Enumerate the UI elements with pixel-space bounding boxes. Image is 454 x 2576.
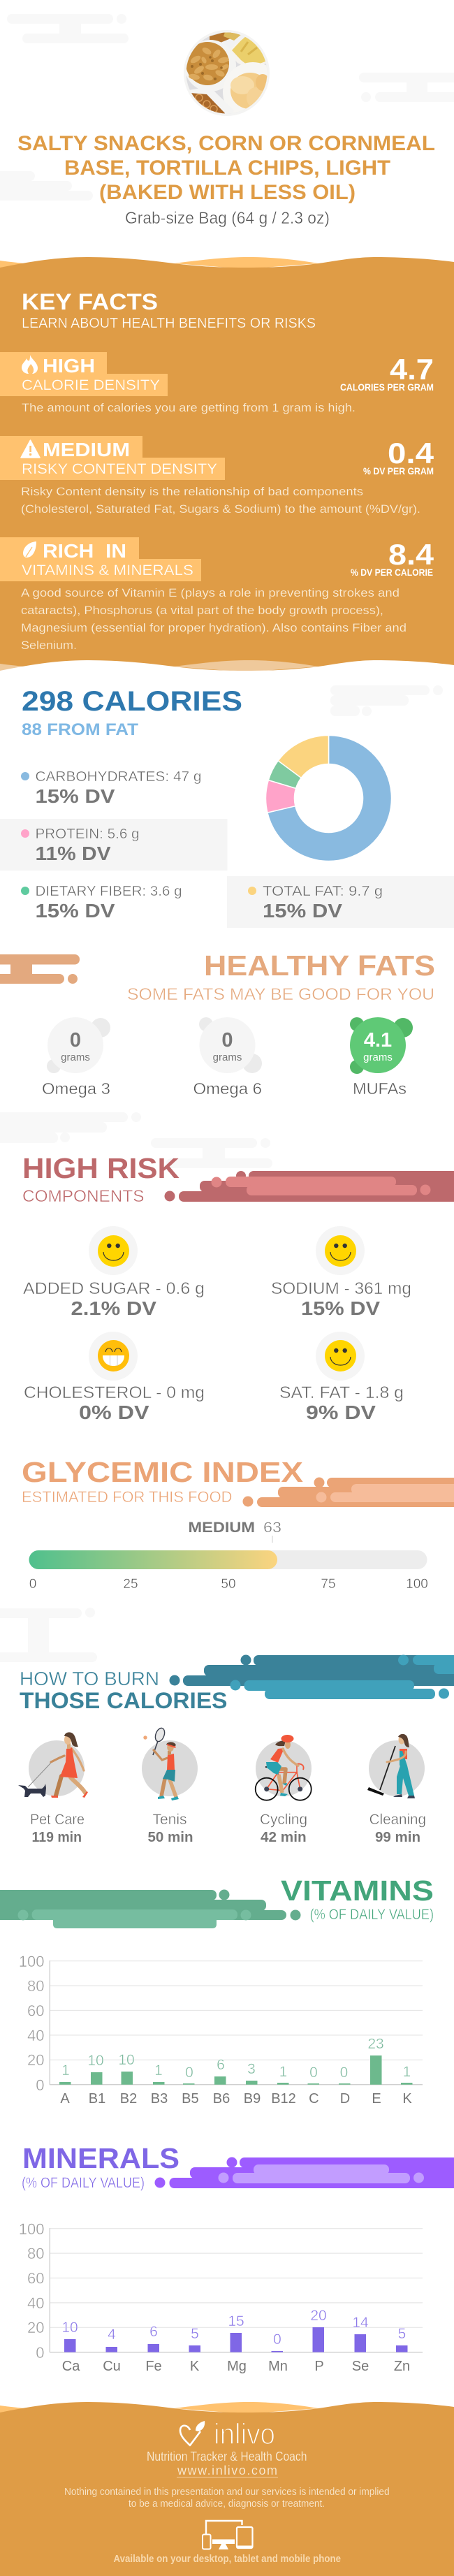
icon: cyclist (256, 1735, 312, 1800)
fat: omega 3: grams (61, 1051, 90, 1063)
heading: vitamins: (% OF DAILY VALUE) (310, 1907, 434, 1923)
risk: added sugar: 2.1% DV (71, 1297, 156, 1319)
bar chart: minerals: 80 (27, 2245, 45, 2262)
bar chart: vitamins: C (309, 2091, 319, 2106)
bar chart: vitamins: B1 (89, 2091, 105, 2106)
fact: vitamins and minerals (0, 537, 434, 652)
serving size: Grab-size Bag (64 g / 2.3 oz) (125, 209, 330, 228)
gauge: glycemic index: 63 (263, 1520, 281, 1536)
risk: saturated fat (279, 1332, 404, 1423)
activity: pet care: Pet Care (30, 1812, 85, 1828)
heading: vitamins: VITAMINS (281, 1875, 434, 1907)
fact: vitamins and minerals: VITAMINS & MINERALS (22, 562, 193, 578)
fat: omega 6: grams (213, 1051, 242, 1063)
background clouds (0, 14, 454, 1662)
activity: pet care (18, 1732, 88, 1845)
fact: calorie density: The amount of calories you are getting from 1 gram is high. (22, 401, 356, 414)
disclaimer: to be a medical advice, diagnosis or treatment. (129, 2498, 325, 2510)
fact: risky content density: (Cholesterol, Saturated Fat, Sugars & Sodium) to the amount (%DV/gr). (21, 502, 420, 516)
heading: key facts: LEARN ABOUT HEALTH BENEFITS OR RISKS (22, 316, 316, 331)
heading: how to burn those calories: HOW TO BURN (20, 1668, 159, 1689)
bar chart: vitamins: 1 (154, 2062, 163, 2079)
bar chart: vitamins: 1 (279, 2064, 287, 2080)
bar chart: vitamins: 80 (27, 1977, 45, 1995)
bar chart: vitamins: B2 (120, 2091, 137, 2106)
bar chart: minerals: 5 (398, 2326, 406, 2342)
fact: vitamins and minerals: Selenium. (21, 639, 77, 652)
logo: inlivo: inlivo (214, 2417, 275, 2450)
bar chart: vitamins: 23 (367, 2036, 384, 2052)
icon: tennis player (143, 1727, 179, 1800)
fat: omega 6: Omega 6 (193, 1079, 262, 1098)
bar chart: minerals: 100 (19, 2220, 45, 2238)
fact: vitamins and minerals: cataracts), Phosphorus (a vital part of the body growth process), (21, 604, 383, 617)
bar chart: minerals: 5 (191, 2326, 199, 2342)
heading: high risk: COMPONENTS (22, 1187, 144, 1206)
fact: calorie density: CALORIES PER GRAM (340, 381, 434, 393)
fat: mufas (350, 1017, 413, 1098)
bar chart: vitamins: B9 (244, 2091, 261, 2106)
bar chart: vitamins: 1 (61, 2062, 70, 2079)
fact: risky content density (0, 436, 434, 516)
activity: pet care: 119 min (32, 1830, 82, 1845)
icon: smiley (98, 1235, 129, 1267)
bar chart: minerals: 14 (352, 2315, 369, 2331)
bar chart: vitamins: 10 (118, 2052, 135, 2068)
fat: omega 3 (42, 1017, 110, 1098)
bar chart: vitamins (19, 1953, 423, 2106)
fact: calorie density: HIGH (43, 355, 95, 377)
bar chart: minerals: Ca (62, 2359, 80, 2374)
icon: devices (203, 2521, 253, 2549)
fat: mufas: grams (363, 1051, 393, 1063)
legend: carbohydrates (21, 769, 201, 807)
fact: risky content density: 0.4 (388, 437, 434, 470)
bar chart: vitamins: K (402, 2091, 412, 2106)
heading: high risk: HIGH RISK (22, 1152, 180, 1184)
photo: snack bowls (184, 30, 270, 116)
bar chart: vitamins: B12 (271, 2091, 296, 2106)
risk: saturated fat: SAT. FAT - 1.8 g (279, 1383, 404, 1402)
bar chart: minerals (19, 2220, 423, 2374)
bar chart: minerals: P (314, 2359, 324, 2374)
decoration: minerals banner (155, 2157, 454, 2188)
gauge: glycemic index (29, 1520, 428, 1592)
gauge: glycemic index: MEDIUM (189, 1520, 255, 1536)
bar chart: minerals: 10 (61, 2320, 78, 2336)
heading: glycemic index: GLYCEMIC INDEX (22, 1456, 303, 1488)
heading: high risk (22, 1152, 180, 1206)
legend: total fat: 15% DV (263, 900, 342, 922)
fat: omega 3: Omega 3 (42, 1079, 110, 1098)
bar chart: minerals: 0 (36, 2344, 45, 2362)
bar chart: vitamins: 40 (27, 2027, 45, 2044)
risk: sodium: 15% DV (301, 1297, 380, 1319)
fat: omega 6: 0 (221, 1029, 233, 1051)
fat: omega 6 (193, 1017, 262, 1098)
heading: vitamins (281, 1875, 434, 1923)
title: SALTY SNACKS, CORN OR CORNMEAL (17, 132, 435, 155)
fact: vitamins and minerals: A good source of Vitamin E (plays a role in preventing strokes and (21, 586, 400, 599)
legend: dietary fiber: 15% DV (35, 900, 115, 922)
disclaimer: Nothing contained in this presentation and our services is intended or implied (64, 2486, 390, 2498)
bar chart: vitamins: E (372, 2091, 381, 2106)
decoration: high risk banner (165, 1171, 454, 1202)
icon: leaf (23, 541, 36, 558)
heading: healthy fats: HEALTHY FATS (204, 949, 435, 982)
icon: warning triangle (21, 440, 40, 458)
icon: grinning face (98, 1340, 129, 1371)
legend: carbohydrates: 15% DV (35, 785, 115, 807)
activity: cleaning (367, 1734, 426, 1845)
fat: omega 3: 0 (70, 1029, 81, 1051)
fact: vitamins and minerals: RICH IN (43, 540, 126, 562)
fact: vitamins and minerals: Magnesium (essential for proper hydration). Also contains Fiber and (21, 621, 407, 634)
icon: smiley (325, 1235, 356, 1267)
heading: key facts (22, 289, 316, 331)
bar chart: minerals: 6 (149, 2324, 158, 2340)
bar chart: minerals: K (190, 2359, 200, 2374)
heading: minerals: (% OF DAILY VALUE) (22, 2175, 145, 2191)
bar chart: vitamins: D (340, 2091, 350, 2106)
bar chart: vitamins: 0 (309, 2065, 318, 2081)
risk: cholesterol: 0% DV (79, 1402, 149, 1423)
decoration: vitamins banner (0, 1889, 300, 1928)
bar chart: vitamins: 60 (27, 2002, 45, 2019)
legend: protein (0, 819, 228, 871)
gauge: glycemic index: 100 (406, 1577, 428, 1592)
legend: dietary fiber (21, 884, 182, 922)
activity: tennis: 50 min (148, 1830, 193, 1845)
icon: flame (22, 355, 38, 374)
fat: mufas: MUFAs (353, 1079, 407, 1098)
bar chart: vitamins: 0 (36, 2076, 45, 2094)
icon: woman walking dog (18, 1732, 88, 1798)
gauge: glycemic index: 50 (221, 1577, 236, 1592)
bar chart: minerals: 0 (273, 2331, 281, 2348)
heading: how to burn those calories: THOSE CALORIES (20, 1688, 228, 1713)
title: BASE, TORTILLA CHIPS, LIGHT (64, 157, 390, 180)
legend: carbohydrates: CARBOHYDRATES: 47 g (35, 769, 201, 785)
activity: tennis: Tenis (152, 1812, 187, 1828)
fact: risky content density: MEDIUM (43, 439, 130, 460)
fact: risky content density: RISKY CONTENT DENSITY (22, 461, 217, 477)
bar chart: minerals: Cu (103, 2359, 121, 2374)
risk: saturated fat: 9% DV (306, 1402, 376, 1423)
gauge: glycemic index: 75 (321, 1577, 336, 1592)
bar chart: vitamins: 1 (403, 2064, 411, 2080)
bar chart: minerals: Se (352, 2359, 369, 2374)
fat: mufas: 4.1 (364, 1029, 392, 1051)
link: website: www.inlivo.com (177, 2464, 277, 2477)
bar chart: minerals: Mn (268, 2359, 288, 2374)
bar chart: vitamins: 10 (87, 2053, 104, 2069)
heading: healthy fats: SOME FATS MAY BE GOOD FOR YOU (127, 985, 434, 1004)
bar chart: minerals: 4 (108, 2327, 116, 2343)
panel: footer: Nutrition Tracker & Health Coach (147, 2450, 307, 2464)
title: (BAKED WITH LESS OIL) (99, 181, 356, 204)
legend: dietary fiber: DIETARY FIBER: 3.6 g (35, 884, 182, 899)
heading: glycemic index: ESTIMATED FOR THIS FOOD (22, 1488, 232, 1506)
heading: healthy fats (127, 949, 435, 1004)
legend: protein: PROTEIN: 5.6 g (35, 827, 140, 842)
disclaimer (64, 2486, 390, 2510)
fact: calorie density: CALORIE DENSITY (22, 377, 160, 393)
risk: added sugar: ADDED SUGAR - 0.6 g (23, 1279, 205, 1298)
heading: calories (22, 686, 242, 739)
activity: cycling: Cycling (260, 1812, 307, 1828)
panel: key facts (0, 257, 454, 674)
icon: woman sweeping (367, 1734, 415, 1798)
bar chart: minerals: 20 (310, 2308, 327, 2324)
bar chart: vitamins: 20 (27, 2051, 45, 2069)
bar chart: vitamins: B5 (182, 2091, 199, 2106)
activity: cleaning: 99 min (375, 1830, 420, 1845)
bar chart: minerals: Zn (394, 2359, 410, 2374)
bar chart: minerals: 15 (228, 2313, 244, 2329)
heading: calories: 88 FROM FAT (22, 720, 138, 739)
bar chart: minerals: 60 (27, 2269, 45, 2287)
heading: how to burn those calories (20, 1668, 228, 1713)
risk: sodium: SODIUM - 361 mg (271, 1279, 411, 1298)
bar chart: minerals: 20 (27, 2319, 45, 2336)
panel: footer: Available on your desktop, tablet and mobile phone (113, 2553, 341, 2565)
heading: minerals (22, 2142, 180, 2191)
fact: risky content density: Risky Content density is the relationship of bad components (21, 485, 363, 498)
bar chart: minerals: Mg (227, 2359, 247, 2374)
logo: inlivo (180, 2417, 275, 2450)
decoration: burn calories banner (169, 1654, 454, 1699)
bar chart: minerals: 40 (27, 2294, 45, 2312)
panel: footer (0, 2402, 454, 2576)
bar chart: vitamins: 6 (217, 2057, 225, 2073)
legend: total fat: TOTAL FAT: 9.7 g (263, 884, 383, 899)
donut chart: macronutrients (266, 735, 392, 861)
bar chart: vitamins: 0 (340, 2065, 348, 2081)
activity: cycling (256, 1735, 312, 1845)
fact: vitamins and minerals: % DV PER CALORIE (351, 567, 433, 578)
legend: total fat (227, 876, 454, 928)
title (17, 132, 435, 204)
risk: cholesterol: CHOLESTEROL - 0 mg (24, 1383, 205, 1402)
activity: cleaning: Cleaning (369, 1812, 426, 1828)
bar chart: vitamins: A (60, 2091, 70, 2106)
gauge: glycemic index: 25 (123, 1577, 138, 1592)
fact: calorie density (0, 352, 434, 414)
decoration: glycemic banner (243, 1477, 454, 1507)
risk: added sugar (23, 1226, 205, 1319)
heading: key facts: KEY FACTS (22, 289, 158, 314)
risk: cholesterol (24, 1332, 205, 1423)
activity: tennis (142, 1727, 198, 1845)
decoration: healthy fats banner (0, 954, 80, 984)
bar chart: vitamins: 0 (185, 2065, 193, 2081)
heading: calories: 298 CALORIES (22, 686, 242, 717)
legend: protein: 11% DV (35, 843, 111, 864)
bar chart: minerals: Fe (145, 2359, 162, 2374)
activity: cycling: 42 min (261, 1830, 307, 1845)
gauge: glycemic index: 0 (29, 1577, 36, 1592)
fact: vitamins and minerals: 8.4 (388, 538, 434, 571)
bar chart: vitamins: 3 (247, 2061, 256, 2077)
icon: smiley (325, 1340, 356, 1371)
bar chart: vitamins: B6 (213, 2091, 230, 2106)
bar chart: vitamins: 100 (19, 1953, 45, 1970)
risk: sodium (271, 1226, 411, 1319)
fact: calorie density: 4.7 (390, 353, 434, 386)
fact: risky content density: % DV PER GRAM (363, 465, 434, 476)
heading: minerals: MINERALS (22, 2142, 180, 2174)
bar chart: vitamins: B3 (151, 2091, 168, 2106)
heading: glycemic index (22, 1456, 303, 1506)
